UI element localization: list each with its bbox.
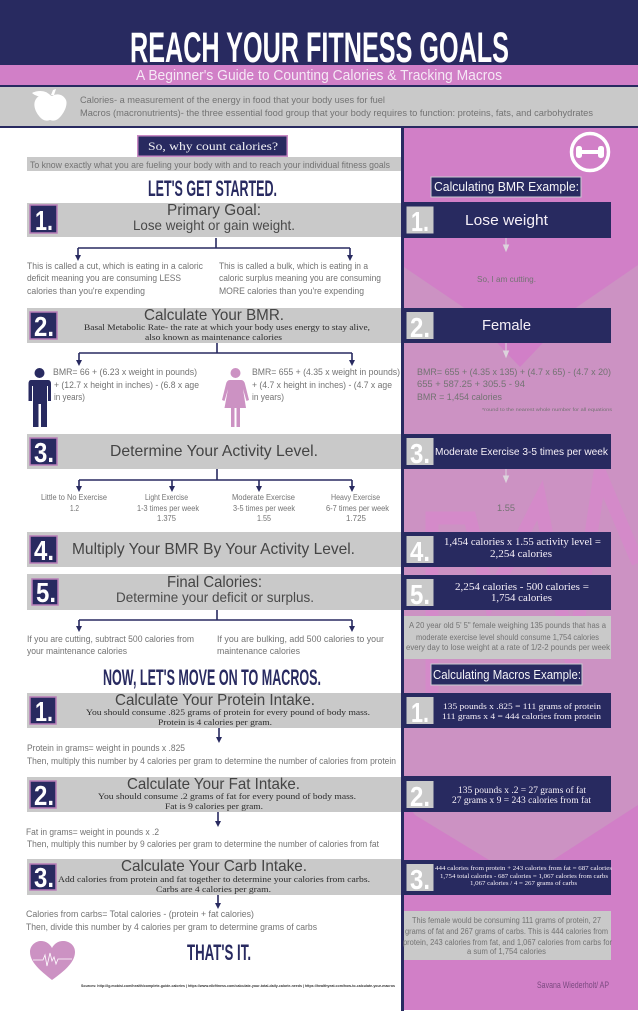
panel: macro 3 carbs: Add calories from protein and fat together to determine your calories from carbs. — [58, 874, 370, 884]
panel: step 4 multiply: Multiply Your BMR By Your Activity Level. — [72, 541, 355, 558]
panel: macro 2 fat — [27, 776, 401, 812]
text block: BMR calculation — [417, 367, 613, 412]
panel: macro example 3: 444 calories from protein + 243 calories from fat = 687 calories — [435, 865, 612, 872]
text block: why count: To know exactly what you are fueling your body with and to reach your individual fitness goals — [30, 160, 390, 171]
text block: moderate exercise: 1.55 — [257, 514, 271, 523]
panel: macro example 2: 27 grams x 9 = 243 calories from fat — [452, 795, 592, 805]
panel: right pink column background — [401, 128, 638, 1011]
text block: light exercise: Light Exercise — [145, 493, 188, 502]
text block: male BMR: BMR= 66 + (6.23 x weight in pounds) — [53, 367, 197, 378]
panel: macro 3 carbs — [27, 858, 401, 895]
text block: bulk — [219, 261, 381, 297]
panel: macro summary: grams of fat and 267 grams of carbs. This is 444 calories from — [405, 927, 608, 936]
panel: step 3 activity — [27, 434, 401, 469]
arrow: example 3 — [504, 469, 508, 482]
text block: bulk: This is called a bulk, which is eating in a — [219, 261, 369, 272]
text block: heavy exercise — [326, 493, 390, 523]
panel: macro example 2 — [403, 776, 611, 812]
text block: BMR calculation: *round to the nearest whole number for all equations — [482, 407, 613, 412]
panel: macro example 1: 1. — [411, 697, 429, 728]
panel: macro 1 protein: You should consume .825 grams of protein for every pound of body mass. — [86, 707, 370, 717]
heading: that's it: THAT'S IT. — [187, 940, 251, 965]
panel: calorie summary: every day to lose weight at a rate of 1/2-2 pounds per week — [406, 643, 611, 652]
panel: example step 2: 2. — [410, 312, 430, 343]
heading: calculating macros example — [431, 664, 582, 685]
panel: example step 4: 2,254 calories — [490, 549, 552, 560]
panel: step 2 BMR — [27, 307, 401, 343]
panel: macro 2 fat: Calculate Your Fat Intake. — [127, 776, 300, 793]
arrow: cutting or bulking — [76, 610, 355, 632]
text block: cut: deficit meaning you are consuming LESS — [27, 273, 181, 284]
icon: man — [28, 368, 51, 427]
panel: step 4 multiply — [27, 532, 401, 567]
arrow: male or female — [76, 343, 355, 366]
panel: example step 1: Lose weight — [465, 212, 549, 229]
source line: Sources: http://ig.mobisi.com/health/complete-guide-calories | https://www.nlbfitness.com/calculate-your-total-daily-calorie-needs | https://healthyeat.com/how-to-calculate-your-macros — [81, 983, 396, 988]
icon: heart with pulse — [30, 941, 75, 980]
panel: macro 1 protein: Protein is 4 calories per gram. — [158, 717, 272, 727]
heading: calculating BMR example: Calculating BMR Example: — [434, 180, 579, 194]
panel: macro 1 protein — [27, 692, 401, 728]
panel: macro summary: This female would be consuming 111 grams of protein, 27 — [412, 916, 602, 925]
arrow: example 1 — [504, 238, 508, 251]
panel: example step 4 — [403, 532, 611, 567]
panel: macro 1 protein: Calculate Your Protein Intake. — [115, 692, 315, 709]
subtitle band: A Beginner's Guide to Counting Calories & Tracking Macros — [136, 67, 502, 84]
text block: cutting: If you are cutting, subtract 500 calories from — [27, 634, 194, 645]
text block: bulk: caloric surplus meaning you are consuming — [219, 273, 381, 284]
panel: step 2 BMR: 2. — [34, 311, 54, 342]
text block: heavy exercise: 6-7 times per week — [326, 504, 390, 513]
panel: step 1 primary goal — [27, 202, 401, 237]
text block: carbs formula — [26, 909, 317, 933]
panel: example step 5: 1,754 calories — [491, 593, 552, 604]
panel: macro example 3: 1,067 calories / 4 = 267 grams of carbs — [470, 880, 577, 887]
callout: so, why count calories — [137, 135, 288, 157]
panel: step 2 BMR: also known as maintenance calories — [145, 332, 282, 342]
text block: fat formula — [26, 827, 379, 850]
arrow: carbs — [215, 895, 221, 909]
text block: little exercise: Little to No Exercise — [41, 493, 108, 502]
panel: example step 1: 1. — [411, 206, 429, 237]
panel: example step 3: Moderate Exercise 3-5 times per week — [435, 447, 609, 458]
panel: macro 2 fat: Fat is 9 calories per gram. — [165, 801, 263, 811]
panel: step 3 activity: 3. — [34, 437, 54, 468]
text block: female BMR: + (4.7 x height in inches) - (4.7 x age — [252, 380, 392, 391]
icon: dumbbell — [572, 134, 608, 170]
panel: example step 2 — [403, 308, 611, 343]
panel: macro example 1: 135 pounds x .825 = 111 grams of protein — [443, 701, 602, 711]
text block: cut — [27, 261, 203, 297]
text block: fat formula: Then, multiply this number by 9 calories per gram to determine the number of calories from fat — [27, 839, 379, 850]
panel: macro example 2: 2. — [410, 781, 430, 812]
text block: BMR calculation: BMR = 1,454 calories — [417, 392, 502, 403]
text block: moderate exercise: Moderate Exercise — [232, 493, 296, 502]
panel: macro example 1: 111 grams x 4 = 444 calories from protein — [442, 711, 602, 721]
panel: macro 3 carbs: Calculate Your Carb Intake. — [121, 858, 307, 875]
subtitle band — [0, 65, 638, 85]
panel: macro 2 fat: 2. — [34, 780, 54, 811]
heading: macros: NOW, LET'S MOVE ON TO MACROS. — [103, 665, 321, 690]
panel: macro summary — [403, 911, 612, 960]
panel: macro example 3 — [403, 860, 612, 895]
panel: macro 2 fat: You should consume .2 grams of fat for every pound of body mass. — [98, 791, 356, 801]
panel: macro 3 carbs: 3. — [34, 862, 54, 893]
panel: step 5 final calories — [27, 574, 401, 610]
panel: step 5 final calories: Determine your deficit or surplus. — [116, 589, 314, 605]
text block: heavy exercise: Heavy Exercise — [331, 493, 380, 502]
arrow: protein — [216, 728, 222, 743]
panel: definitions: Calories- a measurement of the energy in food that your body uses for fuel — [80, 95, 385, 106]
panel: definitions: Macros (macronutrients)- the three essential food group that your body requires to function: proteins, fats, and carbohydrates — [80, 108, 593, 119]
panel: example step 3: 3. — [410, 438, 430, 469]
credit: Savana Wiederholt/ AP — [537, 980, 609, 990]
panel: example step 5 — [403, 575, 611, 610]
panel: macro example 1 — [403, 693, 611, 728]
arrow: cut or bulk — [75, 238, 353, 261]
panel: example step 5: 5. — [410, 579, 430, 610]
panel: macro summary: protein, 243 calories from fat, and 1,067 calories from carbs for — [403, 938, 612, 947]
text block: male BMR: + (12.7 x height in inches) - (6.8 x age — [54, 380, 199, 391]
text block: cut: This is called a cut, which is eating in a caloric — [27, 261, 203, 272]
panel: macro 3 carbs: Carbs are 4 calories per gram. — [156, 884, 271, 894]
text block: bulking: maintenance calories — [217, 646, 300, 657]
text block: cut: calories than you're expending — [27, 286, 145, 297]
text block: female BMR — [252, 367, 400, 403]
text block: BMR calculation: BMR= 655 + (4.35 x 135) + (4.7 x 65) - (4.7 x 20) — [417, 367, 611, 378]
panel: step 5 final calories: 5. — [36, 577, 56, 608]
panel: macro example 3: 3. — [410, 864, 430, 895]
panel: calorie summary: moderate exercise level should consume 1,754 calories — [416, 633, 599, 642]
panel: macro example 3: 1,754 total calories - 687 calories = 1,067 calories from carbs — [440, 873, 608, 880]
text block: female BMR: BMR= 655 + (4.35 x weight in pounds) — [252, 367, 400, 378]
text block: bulking — [217, 634, 384, 657]
panel: example step 2: Female — [482, 317, 531, 334]
header band — [0, 0, 638, 65]
panel: step 2 BMR: Calculate Your BMR. — [144, 307, 284, 324]
panel: step 3 activity: Determine Your Activity Level. — [110, 443, 318, 460]
panel: step 2 BMR: Basal Metabolic Rate- the rate at which your body uses energy to stay alive, — [84, 322, 370, 332]
icon: apple — [32, 89, 67, 121]
text block: bulking: If you are bulking, add 500 calories to your — [217, 634, 384, 645]
panel: example step 5: 2,254 calories - 500 calories = — [455, 582, 589, 593]
panel: macro 1 protein: 1. — [35, 696, 53, 727]
panel: example step 3 — [403, 434, 611, 469]
panel: step 1 primary goal: 1. — [35, 205, 53, 236]
text block: BMR calculation: 655 + 587.25 + 305.5 - 94 — [417, 379, 525, 390]
panel: example step 1 — [403, 202, 611, 238]
arrow: fat — [215, 812, 221, 827]
panel: example step 4: 4. — [410, 536, 430, 567]
text block: male BMR: in years) — [54, 392, 85, 403]
panel: step 1 primary goal: Lose weight or gain weight. — [133, 217, 295, 233]
text block: protein formula: Then, multiply this number by 4 calories per gram to determine the number of calories from protein — [27, 756, 396, 767]
text block: protein formula — [27, 743, 396, 767]
panel: macro summary: a sum of 1,754 calories — [467, 947, 546, 956]
text block: fat formula: Fat in grams= weight in pounds x .2 — [26, 827, 159, 838]
panel: macro example 2: 135 pounds x .2 = 27 grams of fat — [458, 785, 587, 795]
text block: cutting: your maintenance calories — [27, 646, 127, 657]
text block: light exercise: 1-3 times per week — [137, 504, 200, 513]
text block: activity value: 1.55 — [497, 503, 515, 514]
arrow: activity levels — [76, 469, 355, 492]
text block: carbs formula: Calories from carbs= Total calories - (protein + fat calories) — [26, 909, 254, 920]
panel: step 1 primary goal: Primary Goal: — [167, 202, 261, 219]
text block: moderate exercise: 3-5 times per week — [233, 504, 296, 513]
text block: little exercise — [41, 493, 108, 513]
text block: male BMR — [53, 367, 199, 403]
panel: calorie summary: A 20 year old 5' 5" female weighing 135 pounds that has a — [409, 621, 607, 630]
heading: calculating BMR example — [431, 177, 581, 197]
text block: protein formula: Protein in grams= weight in pounds x .825 — [27, 743, 185, 754]
text block: light exercise: 1.375 — [157, 514, 177, 523]
panel: step 4 multiply: 4. — [34, 535, 54, 566]
text block: light exercise — [137, 493, 200, 523]
callout: so, why count calories: So, why count calories? — [148, 139, 278, 153]
panel: calorie summary — [404, 616, 611, 659]
text block: bulk: MORE calories than you're expending — [219, 286, 364, 297]
heading: let's get started: LET'S GET STARTED. — [148, 176, 277, 201]
text block: female BMR: in years) — [252, 392, 284, 403]
text block: moderate exercise — [232, 493, 296, 523]
panel: definitions — [0, 85, 638, 128]
text block: cutting result: So, I am cutting. — [477, 275, 536, 284]
panel: example step 4: 1,454 calories x 1.55 activity level = — [444, 537, 601, 548]
heading: calculating macros example: Calculating Macros Example: — [433, 668, 581, 682]
panel: step 5 final calories: Final Calories: — [167, 574, 262, 591]
text block: cutting — [27, 634, 194, 657]
arrow: example 2 — [504, 343, 508, 357]
text block: carbs formula: Then, divide this number by 4 calories per gram to determine grams of carbs — [26, 922, 317, 933]
text block: heavy exercise: 1.725 — [346, 514, 367, 523]
text block: little exercise: 1.2 — [70, 504, 79, 513]
icon: woman — [222, 368, 249, 427]
